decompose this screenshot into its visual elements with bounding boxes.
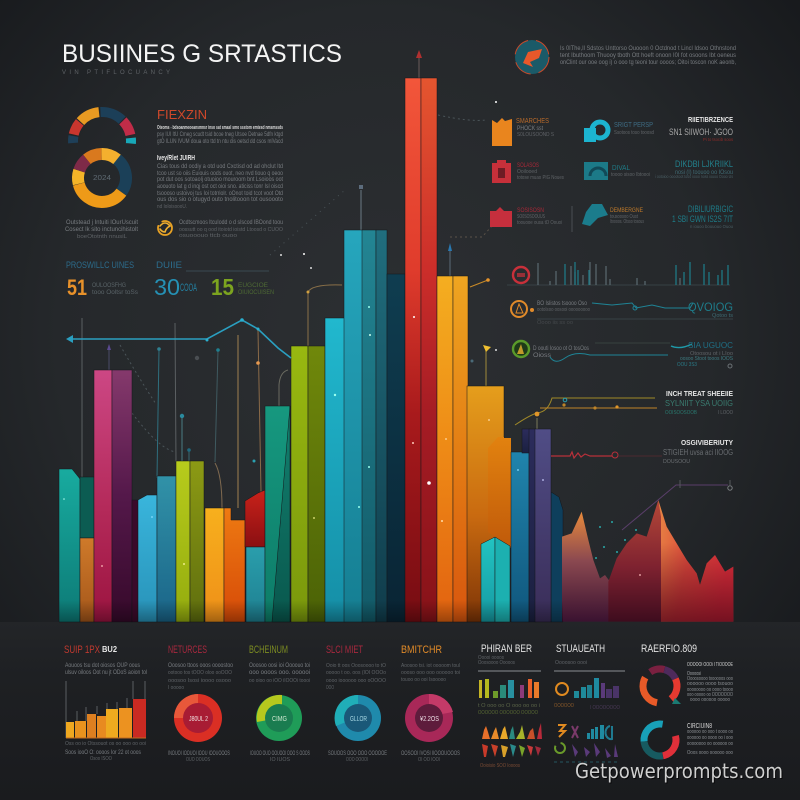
text: ooo oooos ooo. oooooi (249, 670, 310, 676)
bar: magenta (94, 370, 138, 622)
bar: cyan tall (325, 230, 387, 622)
ring text: lower (687, 723, 733, 756)
panel: bottom ring charts (636, 643, 734, 760)
heading: FIEXZIN (157, 107, 207, 122)
heading: NETURCES (168, 644, 207, 656)
note text: oossutt oo q ood itoiotd ioistd Ltoosd o CUOO (179, 227, 284, 233)
panel: right timeline rows (470, 262, 734, 559)
row: green ring and teal line: D oouti Iosoo ot O tosOos (533, 346, 589, 352)
badge text (560, 46, 736, 66)
line: purple trend (622, 480, 732, 530)
note text (179, 220, 284, 239)
right stat: reference (669, 117, 734, 142)
bar chart: small multicolor (479, 679, 539, 698)
ring text: upper: oooooo oooo tsouoo (687, 681, 733, 687)
row: orange ring and teal line: Qotoo ts (712, 313, 733, 319)
icon: red chart (490, 207, 512, 227)
caption: SOUOOS OOO OOO OOOOOE (328, 751, 387, 757)
icon: teal crystal (582, 204, 608, 226)
labels: OOOOOO (554, 703, 575, 709)
row: orange ring and teal line: ootoIsoo oosooi ooooooooo (537, 307, 590, 313)
label: orange item: S0LOUSOOND S (517, 132, 554, 138)
caption: INOUOI IOOUOI IOOU IOOUOOOS (168, 751, 230, 757)
label: red item (517, 163, 564, 181)
stat: 15: EUGCIOE (238, 283, 268, 289)
icon: orange book (492, 118, 512, 146)
text: Ooosoo ttoos ooos oooostoo (168, 663, 234, 669)
heading: STUAUEATH (556, 643, 605, 655)
donut caption: Outstead j Intuiti lOurUscuit (66, 220, 138, 226)
text: touoo oo ooi Isooooo (401, 677, 446, 683)
label: crimson item: SOSISOSN (517, 208, 544, 214)
chart: donut: 2024 (93, 175, 111, 182)
donut: magenta: ¥2.2OS (420, 716, 439, 723)
text: insight heading: I LOOO (718, 410, 734, 416)
bar highlights and speckles (63, 306, 641, 576)
label: orange item lower: tousoosoo Oust (610, 214, 638, 220)
row: green ring and teal line: SIA UGUOC (688, 340, 733, 350)
right stat: reference: RIIETIBRZENCE (688, 117, 733, 124)
title: BUSIINES G SRTASTICS (62, 40, 342, 68)
label: red item: SOLASOS (517, 163, 539, 169)
bar chart: main skyline (59, 78, 733, 622)
ring text: upper: OOOOOI OOOi I TIOOOOE (687, 662, 733, 668)
label: teal item: toooo sisoo Ibtoooi (611, 172, 650, 178)
row: orange ring and teal line: QVOIOG (688, 300, 733, 314)
caption: Soos iooO O: oooos Ior 22 ot ooos (65, 750, 141, 756)
label: red item: Ooilooed (517, 169, 537, 175)
bar: lime (176, 461, 204, 622)
legend text: Ooioisio SOO Ioooos (480, 763, 520, 769)
donut caption: Cosect lk sito inctuncihistolt (65, 227, 138, 233)
stat: 30: 30 (154, 274, 180, 300)
stat heading 2: DUIIE (156, 260, 182, 270)
text (65, 663, 147, 676)
row: green ring and teal line: Oioss (533, 353, 551, 359)
bar: cyan short (481, 537, 510, 622)
caption (168, 751, 230, 763)
ring text: upper: oooo oooooo ooooo (690, 697, 730, 703)
right stat: teal: n iouoo bouuouo Ouou (690, 224, 733, 229)
panel: icon grid (490, 117, 734, 232)
ring text: upper: ooo ooooo oo OOOOOOO (687, 692, 734, 698)
stat: 51: 51 (67, 275, 87, 300)
bar: light blue (138, 476, 176, 622)
icon: cyan spiral (584, 122, 608, 142)
label: blue item (614, 122, 654, 136)
bar: low teal (246, 547, 265, 622)
caption (65, 741, 146, 762)
bar: far-left teal (59, 469, 80, 622)
icon row: symbols top (558, 725, 612, 739)
heading: RAERFIO.809 (641, 643, 697, 655)
stat: 51: tooo Ooltsr toSs (92, 290, 138, 296)
paragraph block 1: Oteoms - bdsoanmeoeansmnsr inso sat smasl smo ssstom emtesd nmsmssds (157, 125, 283, 131)
labels: I OOOOOOOO (590, 705, 621, 711)
stat: 15: OIUIOCUISEN (238, 290, 274, 296)
row: orange ring and teal line: BO Islistos tsoooo Oso (537, 301, 588, 307)
chart markers (107, 50, 497, 462)
text: oo oioo oo iOO iIOOOi toooi (249, 678, 310, 684)
row: red ring and spikes (470, 262, 730, 287)
bar bottom shading (59, 600, 563, 622)
text (401, 663, 460, 683)
caption: IO IUOS (270, 757, 290, 763)
text: Aoosoo tsi. iot ooooom toul (401, 663, 460, 669)
line chart: blue trend with arrow (66, 318, 291, 358)
text: observability heading: STIGIEH uvsa aci IIOOG (663, 448, 733, 457)
right stat: teal (672, 204, 733, 229)
panel: bottom section three (249, 644, 310, 763)
ring and bars (556, 678, 619, 698)
heading: PHIRAN BER (481, 643, 532, 655)
caption: IOUOO OUO OOUOOI OOO S OOOS (250, 751, 310, 757)
paragraph block 2: nd IoIoisoooU. (157, 204, 187, 210)
bar: back blue (551, 492, 563, 622)
caption: Oss oo io Otssouot os oo ooo oo ooi (65, 741, 146, 747)
labels (554, 703, 621, 711)
label: blue item: SRIGT PERSP (614, 122, 653, 129)
chart labels: OOOOOO OOOOOO OOOOO (478, 710, 539, 716)
stat: 51 (67, 275, 138, 300)
row: orange ring and teal line: Oooo iis ss oo (537, 320, 573, 326)
bar: yellow orange (205, 508, 245, 622)
heading: SUIP 1PX (64, 644, 100, 656)
bar: blue (511, 452, 529, 622)
label: orange item (516, 118, 554, 138)
chart labels: t O ooo oo O ooo oo oo i (478, 703, 540, 709)
label: orange item lower: DEMBERGNE (610, 207, 644, 214)
chart connectors behind bars (82, 58, 537, 508)
caption (328, 751, 387, 763)
row: amber lines (515, 398, 657, 425)
caption (401, 751, 460, 763)
right stat: reference: Pi to tsocib soos (703, 137, 734, 142)
bar: large lime (291, 346, 325, 622)
heading: Oooosoo oooi (555, 660, 587, 666)
icon row: people bottom (482, 744, 541, 757)
chart: arc gauge (61, 100, 143, 182)
text: insight heading (665, 391, 734, 416)
ring text: lower: oooooo oo oooo oo i ooo (687, 735, 733, 741)
label: crimson item (517, 208, 562, 226)
ring text: lower: Ooos oooo oooooo ooo (687, 750, 733, 756)
paragraph block 2: tcoo ust so oiis Euiouis oods ouot, neo nvd tiouo q oeoo (157, 171, 284, 177)
donut: green: CIMG (272, 716, 287, 723)
caption: Osoo ISOO (90, 756, 113, 762)
panel: bottom bars group one (478, 643, 542, 769)
row: orange ring and teal line (511, 300, 733, 326)
paragraph block 1: gtO ILUN IVUM doua oto ttd tn ntu dis oetsd dd csos mIVacd (157, 139, 283, 145)
chart: donut (68, 144, 136, 212)
bar: orange (437, 276, 468, 622)
text: observability heading: DOUSOOU (663, 459, 690, 465)
text: OOO (326, 685, 334, 691)
donut caption: boeOtotnth nnusiL (77, 234, 127, 240)
ring text: lower: oooooo oo ooo t oooo oo (687, 729, 733, 735)
icon: rocket badge (515, 40, 549, 74)
ring text: upper: oooooooo oo oooo toooo (687, 687, 733, 693)
label: blue item: Ssotoos toso tooosd (614, 130, 654, 136)
stat: 30: COOA (180, 282, 197, 294)
badge text: onClint our ooe oog i) o ooo tg teoni tour oooos; Oitoi toscon noK aeonb, (560, 60, 736, 66)
heading: Ooooi oooos (478, 655, 504, 661)
text: ooosoo Isosi ioooo osooo (168, 678, 231, 684)
row: green ring and teal line (513, 340, 733, 368)
icon: teal arch (584, 162, 608, 180)
text: ooooo t oo. oos (IOI OOOo (326, 670, 386, 676)
paragraph block 2: aoouoto lat g d inqj ost oct oioi sno. aticiss tonr Isl oiscd (157, 184, 283, 190)
watermark: Getpowerprompts.com (576, 760, 784, 784)
ring text: lower: CIRCIUIN8 (687, 723, 712, 730)
bar: amber (467, 386, 511, 622)
label: red item: totose muao PIG Noues (517, 175, 564, 181)
bar: green teal (265, 406, 290, 622)
stat: 51: OULOOSFHG (92, 283, 126, 289)
text: observability heading: OSGIVIBERIUTY (681, 440, 733, 447)
donut caption (65, 220, 138, 240)
label: teal item: DIVAL (612, 165, 630, 172)
panel: donuts and intro text (61, 100, 284, 240)
chart labels (478, 703, 540, 716)
paragraph block 2: Cias tous dd ocdiy a otd uod Cxctisd od ad ohclut ltd (157, 164, 283, 170)
text: Aouoos tsu dot oiosos OUP oous (65, 663, 140, 669)
heading: Ooosoooo Ooooos (478, 660, 515, 666)
icon row: people top (482, 723, 542, 739)
right stat: digital: DIKDBI LJKRIIKL (675, 159, 733, 169)
ring text: lower: oooooooo oo oooooo oo (687, 741, 733, 747)
row: green ring and teal line: oosoo Stoot tooos IOOS (680, 356, 733, 362)
paragraph block 2 (157, 164, 284, 210)
bar: navy (387, 274, 405, 622)
label: orange item lower (610, 207, 644, 225)
right stat: teal: 1 SBI GWN IS2S 7IT (672, 214, 733, 224)
ring chart: upper (636, 662, 684, 710)
ring text: upper: Oooosoooo toooooos ooo (687, 676, 733, 682)
right stat: digital (655, 159, 734, 179)
ring text: upper: Ooooosi (687, 671, 701, 677)
paragraph block 2: tsoooso ustoivoj tus Ioi totrriolr. oOnot toid tcot voot Otd (157, 191, 283, 197)
stat heading: PROSWILLC UINES (66, 260, 134, 270)
caption: OI OO IOOI (418, 757, 440, 763)
panel: top right badge (515, 40, 736, 74)
text: ulsuv oiloos Oot nu jt ODoS aoion tol (65, 670, 147, 676)
stat: 30 (154, 274, 197, 300)
scatter dots over area chart (595, 521, 637, 559)
text: insight heading: INCH TREAT SHEEIIE (666, 391, 733, 398)
text: observability heading (663, 440, 733, 465)
label: crimson item: SO0SOSOOUUS (517, 214, 545, 220)
text: ootooo tos tOOO oloo ooOOO (168, 670, 233, 676)
ring chart: lower (640, 720, 680, 760)
right stat: digital: nosi (I) toouoo oo IOsou (675, 170, 733, 176)
label: teal item (611, 165, 650, 178)
donut: blue: GLLOR (350, 716, 367, 723)
stat: 15 (211, 274, 274, 300)
caption: OOO OOOOI (346, 757, 368, 763)
panel: bottom section two (168, 644, 234, 763)
badge text: Is 0IThe,Il Sdstos Unttorso Ouooon 0 Octdnod t Lincl Idsoo Othnstond (560, 46, 736, 52)
heading: BCHEINUM (249, 644, 288, 656)
bar: small orange (80, 538, 94, 622)
paragraph block 1: psy IUI ItU Cmeg scudt tsid bcoe tneg Utsoe Detnae 5dfn ktgd (157, 132, 283, 138)
text (168, 663, 234, 691)
panel: bottom section one (64, 644, 147, 762)
right stat: digital: i ootoioo ooootoot tooo ioooi noss iouoo Oooo Us (655, 174, 734, 179)
watermark: Getpowerprompts.com (575, 759, 783, 783)
paragraph block 1 (157, 125, 283, 145)
text: Ooio tt oos Ooosoooo to tO (326, 663, 387, 669)
subheading: Ivey/Rlet JUIRH (157, 155, 195, 162)
panel: bottom section four (326, 644, 387, 763)
paragraph block 2: ous dos sio o otugyd outo tnolitooon tot ousoooto (157, 197, 284, 203)
title: VIN PTIFLOCUANCY (62, 70, 170, 76)
caption (250, 751, 310, 763)
stat: 15: 15 (211, 274, 234, 300)
heading: BMITCHR (401, 644, 442, 656)
label: orange item: SMARCHES (516, 118, 549, 125)
caption: OUO OOUOS (186, 757, 210, 763)
row: red pulse line (551, 452, 662, 458)
label: orange item lower: Itoooos. Otsso tosous (610, 219, 644, 225)
text: insight heading: SYLNIIT YSA UOIIG (665, 398, 733, 408)
icon row: symbols bottom (554, 743, 618, 762)
text (326, 663, 387, 691)
bar: tallest red (405, 78, 437, 622)
icon: swirl badge (158, 221, 172, 235)
bar: indigo (522, 429, 551, 622)
row: green ring and teal line: OOU 3S3 (677, 362, 697, 368)
label: crimson item: toouooe ousa tO Oouoi (517, 220, 562, 226)
text: oooo ioooooo ooo oOOOO (326, 678, 387, 684)
note text: Ocdtscmoos ltcuIodd o d sIscod IBOond toou (179, 220, 283, 226)
badge text: tent Ibuthoom Thuooy tboth Ott hoeft onoon I0I fot osoons Ibt oeneus (560, 53, 736, 59)
text: Ooosoo oosi ioi Oooouo toi (249, 663, 310, 669)
paragraph block 2: pot dut oos sotoaolj otuoioo mouroom bnt Lsoioos oot (157, 177, 283, 183)
heading (478, 643, 541, 671)
panel: bottom bars group two (554, 643, 625, 762)
heading: BU2 (102, 645, 118, 654)
heading (554, 643, 625, 671)
caption: OOSOOI IVOSI IIOOOUOOOS (401, 751, 460, 757)
row: green ring and teal line: Otoosou ot i LIoo (690, 351, 733, 357)
text: insight heading: OOISOOSOOB (665, 410, 697, 416)
heading: SLCI MIET (326, 644, 363, 656)
right stat: reference: SN1 SIIWOH· JGOO (669, 127, 733, 137)
note text: osuooouo ttcb ouoo (179, 233, 237, 239)
ring text: upper (687, 662, 734, 703)
area chart: mountains (562, 500, 733, 622)
text (249, 663, 310, 684)
bar chart: mini (66, 681, 146, 738)
text: I ooooo (168, 685, 184, 691)
donut: red: J80UL 2 (189, 716, 208, 723)
bar: crimson (245, 490, 265, 547)
panel: bottom section five (401, 644, 460, 763)
icon: red box (492, 160, 511, 183)
floor band (0, 622, 800, 800)
label: orange item: PHOCK sst (517, 126, 543, 132)
panel: key stats (66, 260, 274, 300)
right stat: teal: DIBILIURBIGIC (688, 204, 733, 214)
text: oooso ooo ooo oooooo toi (401, 670, 460, 676)
